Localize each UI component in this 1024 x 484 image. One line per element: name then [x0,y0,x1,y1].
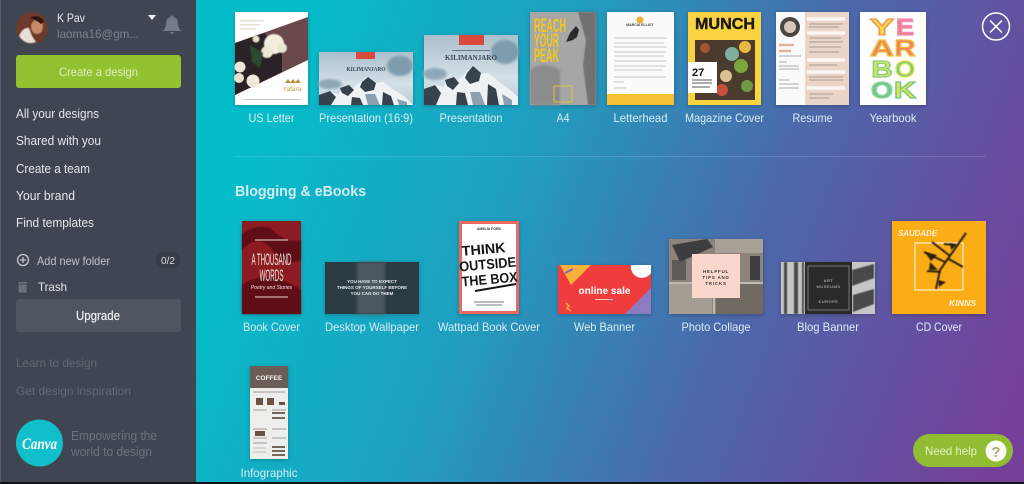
user email: laoma16@gm... [57,27,139,41]
need help button [913,434,1013,467]
thumbnail: Blog Banner: EUROPE [819,299,838,304]
text: A THOUSAND [252,250,292,269]
thumbnail: Desktop Wallpaper: YOU HAVE TO EXPECT [347,279,397,284]
thumbnail: CD Cover: SAUDADE [898,228,937,238]
upgrade button: Upgrade [76,309,120,323]
canva logo [16,420,63,466]
label: Wattpad Book Cover [438,320,540,334]
thumbnail: Presentation 16:9 [318,52,413,125]
thumbnail: Letterhead [607,12,674,125]
thumbnail: Book Cover: WORDS [260,266,284,285]
thumbnail: A4: YOUR [534,31,559,52]
thumbnail: Yearbook: Y [870,14,894,40]
thumbnail: Photo Collage: TIPS AND [702,275,730,280]
navigation menu: Create a team [16,162,90,176]
panel: sidebar [0,0,196,484]
thumbnail: CD Cover [892,221,986,334]
label: Desktop Wallpaper [325,320,419,334]
thumbnail: US Letter: Yafara [283,86,302,93]
heading: Blogging & eBooks: Blogging & eBooks [235,183,366,200]
label: Blog Banner [797,320,859,334]
canva logo: Canva [22,436,57,453]
thumbnail: Yearbook: R [894,35,916,61]
create a design button: Create a design [59,65,138,79]
secondary links: Get design inspiration [16,384,131,398]
thumbnail: Wattpad Book Cover [438,221,540,334]
thumbnail: Yearbook: B [872,56,892,82]
secondary links: Learn to design [16,356,97,370]
tagline: Empowering the [71,429,157,443]
label: Magazine Cover [685,111,764,125]
icon: close button [982,13,1010,40]
navigation menu: All your designs [16,107,99,121]
thumbnail: Blog Banner: MUSEUMS [817,284,840,289]
label: Book Cover [243,320,300,334]
thumbnail: Magazine Cover: 27 [692,67,704,79]
thumbnail: Desktop Wallpaper [325,262,419,334]
thumbnail: US Letter [234,12,308,125]
thumbnail: Photo Collage: TRICKS [705,281,727,286]
label: Photo Collage [682,320,751,334]
label: Letterhead [614,111,668,125]
thumbnail: Yearbook [860,12,926,125]
tagline [70,429,157,459]
secondary links [16,356,131,398]
thumbnail: Book Cover: Poetry and Stories [251,285,293,291]
thumbnail: Book Cover [242,221,301,334]
add new folder row: 0/2 [161,256,175,267]
tagline: world to design [70,445,152,459]
thumbnail: Infographic [240,366,298,480]
navigation menu: Find templates [16,216,94,230]
thumbnail: Resume [776,12,849,125]
add new folder row [18,252,180,268]
thumbnail: Wattpad Book Cover: OUTSIDE [458,254,517,274]
label: Web Banner [574,320,635,334]
thumbnail: Yearbook: O [895,56,915,82]
label: Presentation [440,111,502,125]
bottom edge strip [0,482,1024,484]
thumbnail: Wattpad Book Cover: AMELIA FORD [477,227,502,231]
need help button: Need help [925,444,977,458]
label: CD Cover [916,320,962,334]
thumbnail: Desktop Wallpaper: YOU CAN DO THEM [351,291,394,296]
thumbnail: Blog Banner: ART [824,278,833,283]
label: Resume [792,111,833,125]
thumbnail: A4: REACH [534,16,566,37]
divider [235,156,986,157]
create a design button [16,55,181,88]
navigation menu [16,107,101,230]
thumbnail: Photo Collage: HELPFUL [703,269,729,274]
thumbnail: Letterhead: MARCIA ELLIOT [626,23,654,27]
user avatar [16,12,48,44]
thumbnail: CD Cover: KINNS [949,298,976,308]
thumbnail: A4 [530,12,596,125]
thumbnail: Yearbook: K [894,77,916,103]
upgrade button [16,299,181,332]
thumbnail: Presentation: KILIMANJARO [445,53,497,62]
icon: bell [163,16,181,34]
thumbnail: Magazine Cover: MUNCH [695,16,755,33]
trash row [18,280,67,294]
navigation menu: Shared with you [16,134,101,148]
thumbnail: Web Banner: online sale [578,285,631,297]
label: Yearbook [870,111,917,125]
thumbnail: Wattpad Book Cover: THINK [461,239,506,259]
need help button: ? [991,444,1001,461]
thumbnail: Blog Banner [781,262,875,334]
thumbnail: Yearbook: A [870,35,894,61]
thumbnail: Desktop Wallpaper: THINGS OF YOURSELF BEFORE [337,285,407,290]
trash row: Trash [38,280,67,294]
label: Presentation (16:9) [319,111,413,125]
label: US Letter [248,111,294,125]
thumbnail: Infographic: COFFEE [256,375,283,382]
icon: dropdown arrow [148,15,156,20]
thumbnail: Presentation 16:9: KILIMANJARO [346,66,386,73]
thumbnail: Yearbook: E [896,14,914,40]
add new folder row: Add new folder [37,254,110,268]
label: A4 [556,111,570,125]
thumbnail: Wattpad Book Cover: THE BOX [461,269,519,289]
thumbnail: Photo Collage [669,239,763,334]
thumbnail: Yearbook: O [871,77,893,103]
thumbnail: Magazine Cover [685,12,764,125]
thumbnail: A4: PEAK [534,46,559,67]
user name: K Pav [57,11,85,25]
navigation menu: Your brand [16,189,75,203]
thumbnail: Web Banner [558,265,651,334]
label: Infographic [240,466,298,480]
thumbnail: Presentation [423,35,519,125]
